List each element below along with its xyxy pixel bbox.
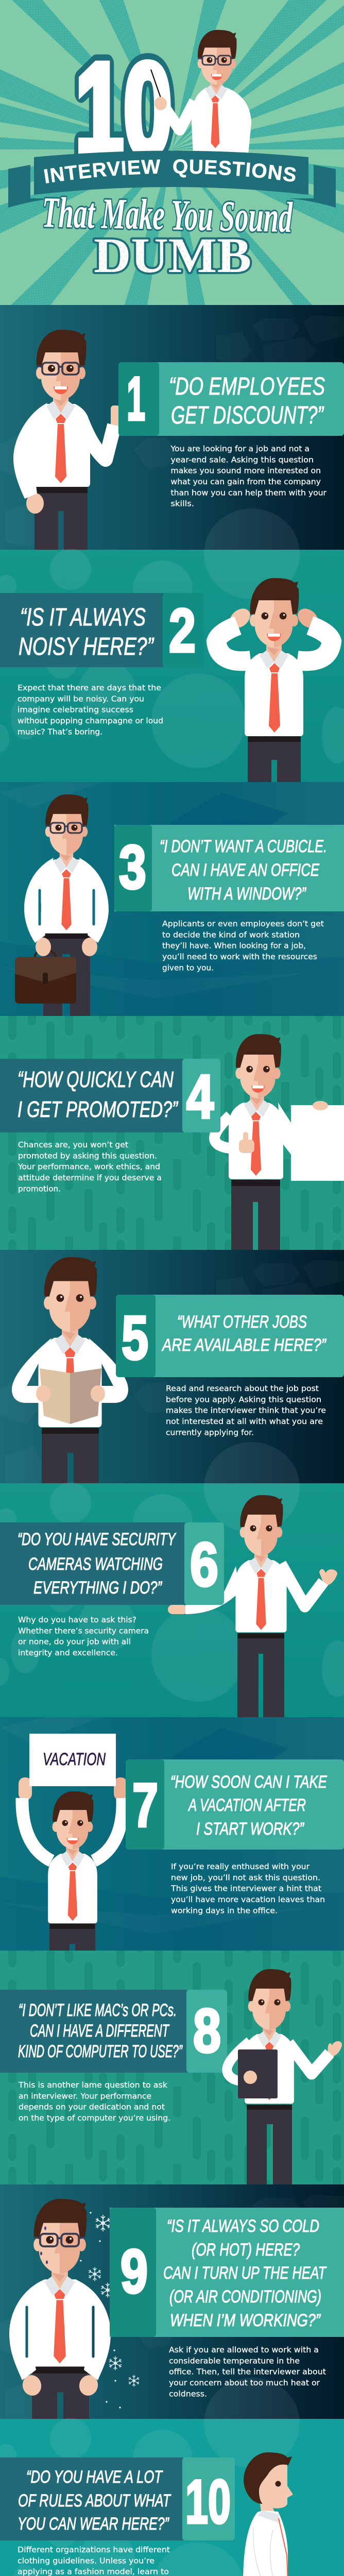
panel: question 3 — [0, 782, 344, 1016]
question bar 8 — [0, 1990, 187, 2073]
explanation 4: Your performance, work ethics, and — [18, 1162, 160, 1172]
question card 3 — [114, 825, 344, 911]
question card 7: I START WORK?” — [196, 1819, 304, 1839]
explanation 7 — [170, 1862, 325, 1915]
explanation 7: new job, you’ll not ask this question. — [171, 1873, 320, 1882]
explanation 9: coldness. — [169, 2389, 207, 2398]
explanation 7: working days in the office. — [171, 1906, 278, 1915]
question bar 10: OF RULES ABOUT WHAT — [18, 2491, 171, 2511]
explanation 1: skills. — [171, 499, 194, 509]
number tab 4: 4 — [186, 1062, 214, 1131]
explanation 2: imagine celebrating success — [18, 705, 133, 715]
question bar 8: CAN I HAVE A DIFFERENT — [30, 2021, 169, 2041]
question bar 8: “I DON’T LIKE MAC’s OR PCs. — [19, 2001, 177, 2020]
presenter character with pointer — [151, 30, 251, 155]
character 6 gesturing — [168, 1495, 337, 1717]
explanation 3 — [162, 919, 324, 972]
question bar 2: “IS IT ALWAYS — [20, 604, 146, 631]
ribbon banner — [8, 150, 336, 208]
explanation 3: to decide the kind of work station — [162, 930, 300, 939]
explanation 5 — [166, 1384, 326, 1437]
explanation 3: you’ll need to work with the resources — [162, 952, 317, 961]
character 5 reading — [12, 1257, 128, 1483]
explanation 1: year-end sale. Asking this question — [171, 455, 314, 464]
question bar 2 — [0, 593, 204, 667]
question bar 2: NOISY HERE?” — [19, 633, 154, 660]
question card 3: WITH A WINDOW?” — [187, 884, 306, 904]
question card 9 — [110, 2208, 344, 2337]
explanation 2: music? That’s boring. — [18, 727, 102, 736]
explanation 9: your concern about too much heat or — [169, 2378, 320, 2387]
explanation 8 — [18, 2080, 170, 2123]
explanation 6 — [18, 1615, 149, 1657]
number tab 8: 8 — [193, 1996, 221, 2065]
explanation 6: or none, do your job with all — [18, 1637, 131, 1647]
panel: question 1 — [0, 305, 344, 550]
question bar 10 — [0, 2458, 235, 2540]
question bar 8: KIND OF COMPUTER TO USE?” — [18, 2042, 183, 2061]
explanation 1: You are looking for a job and not a — [170, 444, 309, 453]
explanation 2: company will be noisy. Can you — [18, 694, 144, 703]
snowflakes and dots — [80, 2212, 139, 2409]
question card 7: 7 — [132, 1771, 158, 1840]
explanation 7: This gives the interviewer a hint that — [170, 1884, 321, 1893]
vacation sign: VACATION — [43, 1750, 106, 1769]
question bar 6: EVERYTHING I DO?” — [33, 1578, 162, 1598]
explanation 2: Expect that there are days that the — [18, 683, 161, 692]
question card 5: 5 — [122, 1303, 148, 1372]
explanation 8: This is another lame question to ask — [18, 2080, 167, 2090]
panel: header with sunburst — [0, 0, 344, 305]
explanation 5: currently applying for. — [166, 1428, 254, 1437]
panel: question 9 — [0, 2184, 344, 2427]
explanation 7: you’ll have more vacation leaves than — [171, 1895, 325, 1904]
explanation 2 — [18, 683, 163, 736]
question card 1 — [118, 362, 344, 436]
explanation 6: Whether there’s security camera — [18, 1626, 149, 1635]
title number 10: 10 — [75, 36, 172, 183]
question card 9: (OR HOT) HERE? — [192, 2240, 300, 2260]
explanation 9: office. Then, tell the interviewer about — [169, 2367, 326, 2377]
explanation 5: Read and research about the job post — [166, 1384, 319, 1393]
title number 10 — [74, 53, 175, 154]
explanation 6: Why do you have to ask this? — [18, 1615, 136, 1624]
question bar 4: I GET PROMOTED?” — [18, 1097, 179, 1122]
explanation 4: promoted by asking this question. — [18, 1151, 157, 1160]
question bar 6: 6 — [190, 1530, 218, 1599]
explanation 10 — [18, 2545, 170, 2576]
character 10 in profile with briefcase — [231, 2452, 307, 2576]
explanation 4: promotion. — [18, 1184, 61, 1193]
explanation 5: before you apply. Asking this question — [166, 1395, 321, 1404]
explanation 8: an interviewer. Your performance — [19, 2091, 151, 2100]
question bar 6: CAMERAS WATCHING — [28, 1554, 163, 1574]
character 3 with briefcase — [15, 794, 109, 1016]
panel: question 5 — [0, 1250, 344, 1492]
explanation 4: attitude determine if you deserve a — [18, 1173, 162, 1182]
explanation 8: depends on your dedication and not — [19, 2103, 165, 2112]
ribbon text: INTERVIEW QUESTIONS — [44, 159, 296, 183]
explanation 10: Different organizations have different — [18, 2545, 170, 2554]
question bar 10: “DO YOU HAVE A LOT — [26, 2467, 163, 2487]
character 2 hands on ears — [216, 578, 332, 782]
explanation 6: integrity and excellence. — [18, 1648, 118, 1657]
explanation 2: without popping champagne or loud — [18, 716, 163, 725]
character 4 with blank sign — [215, 1034, 344, 1250]
vacation sign — [29, 1734, 116, 1786]
explanation 1: than how you can help them with your — [171, 488, 327, 497]
question bar 10: YOU CAN WEAR HERE?” — [18, 2514, 169, 2534]
explanation 5: not interested at all with what you are — [166, 1417, 323, 1426]
explanation 9 — [169, 2345, 326, 2398]
explanation 7: If you’re really enthused with your — [171, 1862, 310, 1871]
panel: question 7 — [0, 1717, 344, 1951]
character 9 sweating — [9, 2199, 111, 2419]
explanation 3: given to you. — [162, 963, 214, 972]
explanation 3: Applicants or even employees don’t get — [162, 919, 324, 928]
explanation 1: what you can gain from the company — [171, 477, 321, 486]
question card 7 — [126, 1759, 344, 1850]
question bar 6: “DO YOU HAVE SECURITY — [18, 1530, 177, 1549]
number tab 8 — [186, 1990, 227, 2073]
character 1 — [13, 330, 120, 550]
explanation 4: Chances are, you won’t get — [18, 1140, 128, 1149]
DUMB heading: DUMB — [94, 228, 251, 283]
explanation 3: they’ll have. When looking for a job, — [162, 941, 306, 951]
panel: question 10 — [0, 2378, 344, 2576]
explanation 8: on the type of computer you’re using. — [19, 2113, 170, 2123]
panel: question 2 — [0, 509, 344, 782]
question card 9: 9 — [121, 2237, 148, 2306]
explanation 1: makes you sound more interested on — [171, 466, 321, 476]
panel: question 6 — [0, 1442, 344, 1717]
question card 5 — [116, 1295, 344, 1377]
character 7 holding vacation sign — [19, 1734, 127, 1951]
explanation 5: makes the interviewer think that you’re — [166, 1406, 326, 1415]
title number 10: 10 — [75, 36, 172, 183]
panel: question 8 — [0, 1951, 344, 2184]
explanation 4 — [18, 1140, 162, 1193]
panel: question 4 — [0, 1016, 344, 1250]
character 8 with clipboard — [227, 1969, 342, 2184]
question bar 4: “HOW QUICKLY CAN — [18, 1067, 174, 1092]
explanation 9: Ask if you are allowed to work with a — [169, 2345, 319, 2354]
question bar 4 — [0, 1059, 183, 1132]
question bar 6 — [0, 1522, 224, 1605]
explanation 1 — [170, 444, 327, 509]
question bar 10: 10 — [185, 2467, 231, 2536]
question card 3: 3 — [119, 833, 146, 902]
question card 1: 1 — [127, 364, 145, 433]
explanation 9: considerable temperature in the — [169, 2356, 300, 2365]
explanation 10: clothing guidelines. Unless you’re — [18, 2556, 154, 2565]
question bar 2: 2 — [169, 596, 196, 665]
